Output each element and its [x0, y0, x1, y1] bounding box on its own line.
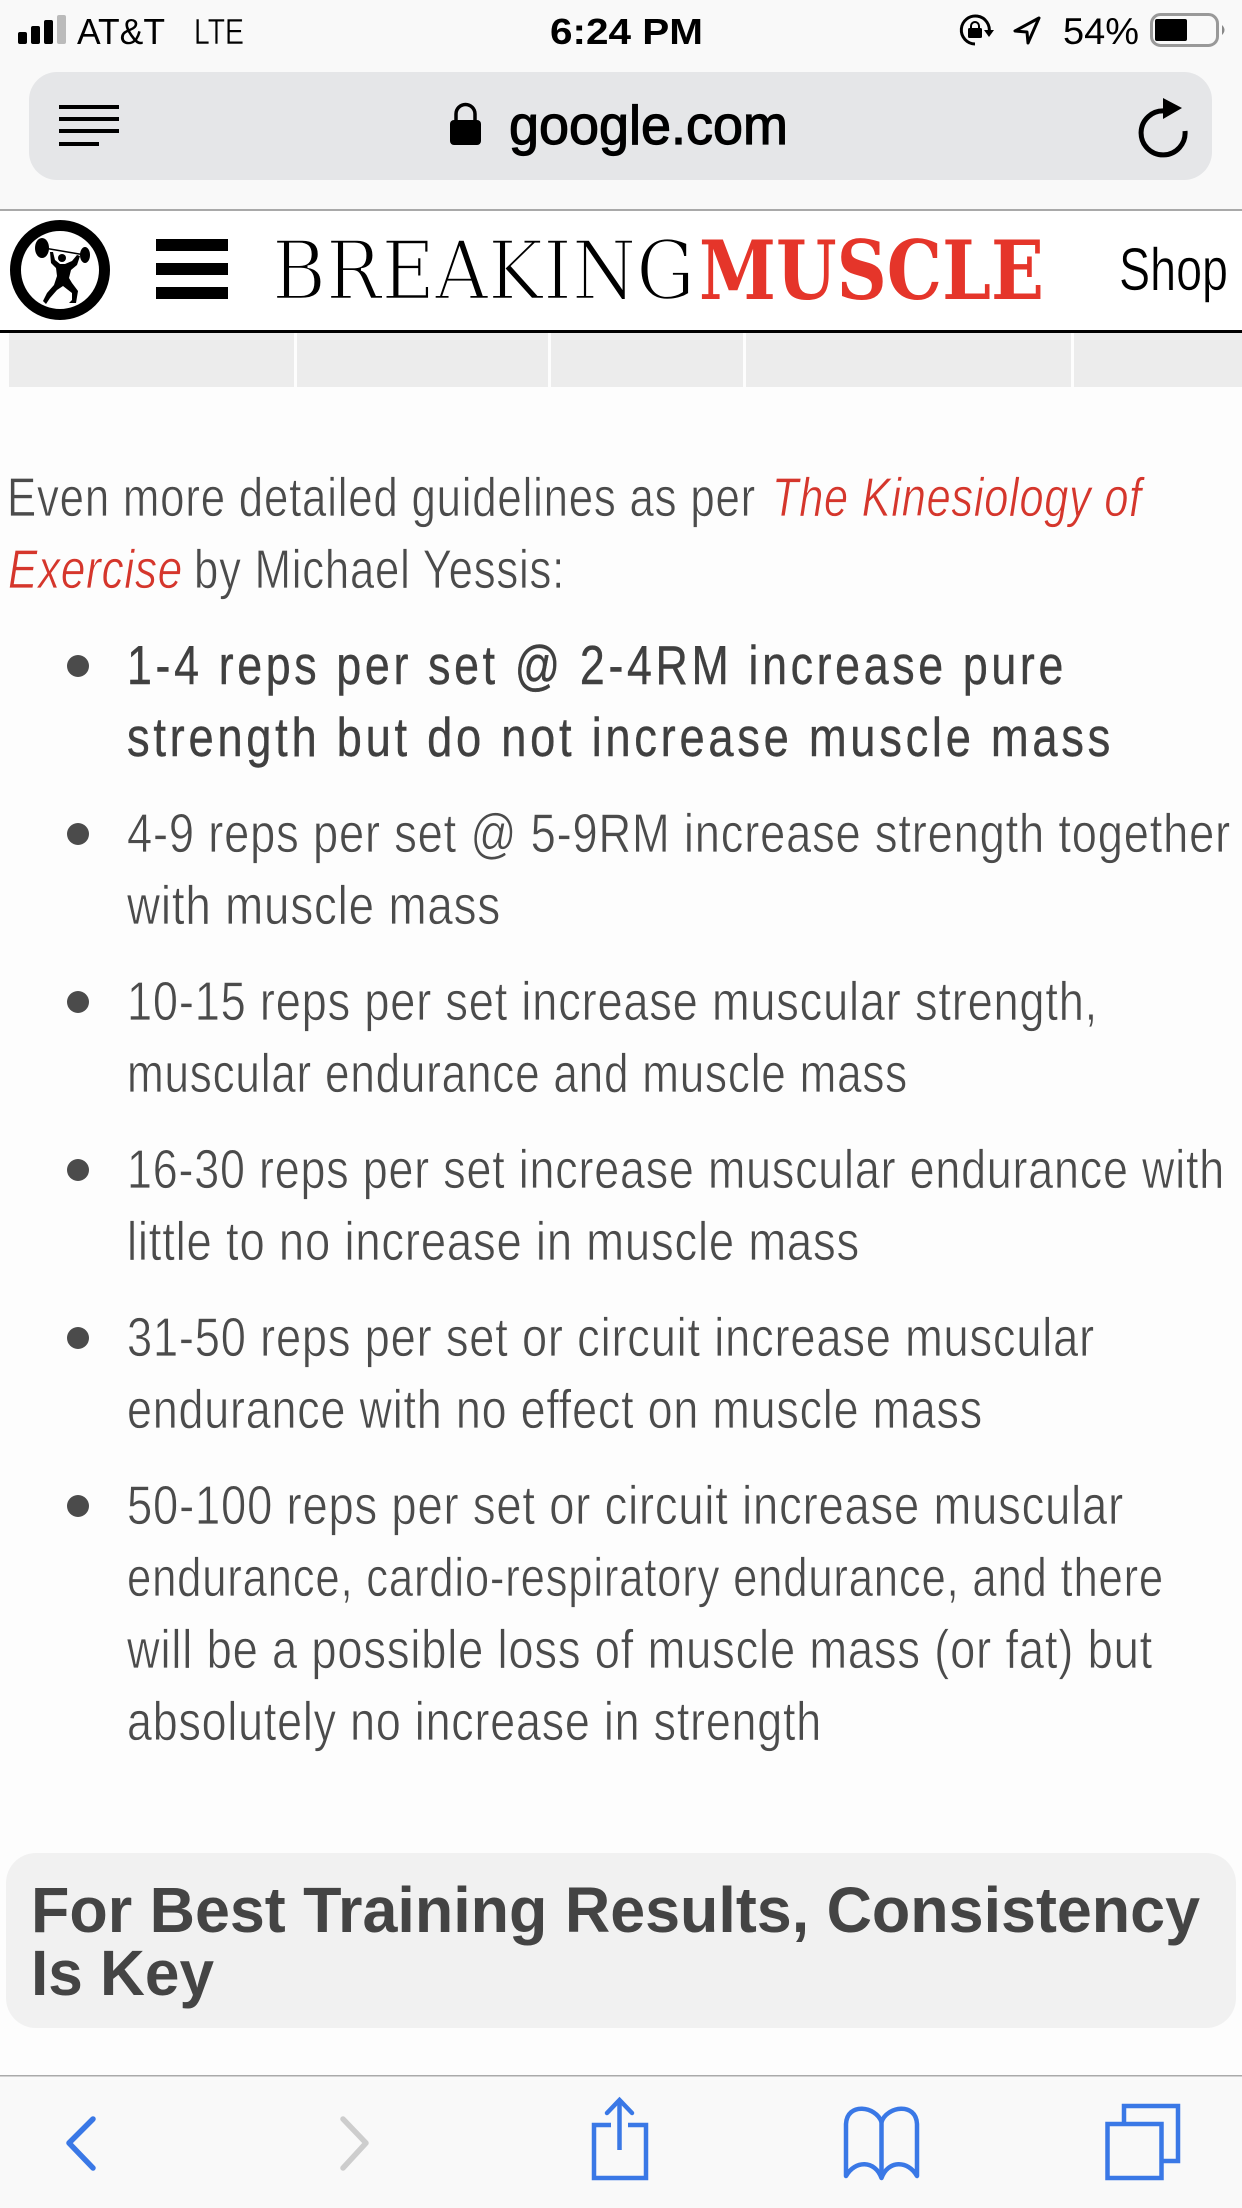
- intro paragraph: [7, 466, 1146, 600]
- icon: location arrow: [1015, 18, 1039, 43]
- icon: back chevron: [69, 2119, 93, 2168]
- clock: 6:24 PM: [550, 11, 703, 52]
- heading text: Is Key: [31, 1937, 214, 2009]
- icon: battery: [1152, 14, 1224, 46]
- carrier text: AT&T: [77, 11, 165, 52]
- bullet 6: absolutely no increase in strength: [127, 1690, 822, 1752]
- bullet 5: endurance with no effect on muscle mass: [127, 1378, 983, 1440]
- intro paragraph: by Michael Yessis:: [194, 538, 565, 600]
- bullet 3: muscular endurance and muscle mass: [127, 1042, 908, 1104]
- bullet 4: [67, 1138, 1225, 1272]
- intro paragraph: The Kinesiology of: [772, 466, 1146, 528]
- logo wordmark: breaking: BREAKING: [272, 225, 695, 319]
- heading text: For Best Training Results, Consistency: [31, 1874, 1200, 1946]
- bullet 6: [67, 1474, 1164, 1752]
- icon: padlock: [450, 104, 481, 145]
- icon: hamburger menu: [156, 239, 228, 299]
- bullet 4: little to no increase in muscle mass: [127, 1210, 860, 1272]
- icon: share: [594, 2100, 646, 2178]
- icon: forward chevron: [343, 2119, 366, 2168]
- panel: browser top bar: [0, 0, 1242, 211]
- battery percent: 54%: [1063, 11, 1139, 52]
- panel: browser bottom toolbar: [0, 2075, 1242, 2208]
- bullet 2: [67, 802, 1231, 936]
- icon: reload: [1141, 98, 1185, 155]
- bullet 3: [67, 970, 1098, 1104]
- icon: bookmarks: [846, 2109, 917, 2178]
- bullet 2: with muscle mass: [126, 874, 501, 936]
- bullet 5: [67, 1306, 1095, 1440]
- icon: weightlifter logo: [16, 226, 104, 314]
- icon: tabs: [1108, 2106, 1178, 2178]
- panel: site navigation header: [0, 211, 1242, 333]
- heading text: [31, 1874, 1200, 2009]
- icon: reader lines: [59, 105, 119, 146]
- intro paragraph: Exercise: [8, 538, 183, 600]
- intro paragraph: Even more detailed guidelines as per: [7, 466, 756, 528]
- panel: table row remnant: [9, 333, 1242, 387]
- logo wordmark: muscle: MUSCLE: [699, 224, 1044, 319]
- network text: LTE: [194, 11, 244, 52]
- url: google.com: [509, 94, 788, 156]
- icon: rotation lock: [961, 16, 994, 44]
- panel: address bar: [29, 72, 1212, 180]
- bullet 1: [67, 634, 1114, 768]
- panel: section heading: [6, 1853, 1236, 2028]
- icon: signal bars: [18, 15, 66, 44]
